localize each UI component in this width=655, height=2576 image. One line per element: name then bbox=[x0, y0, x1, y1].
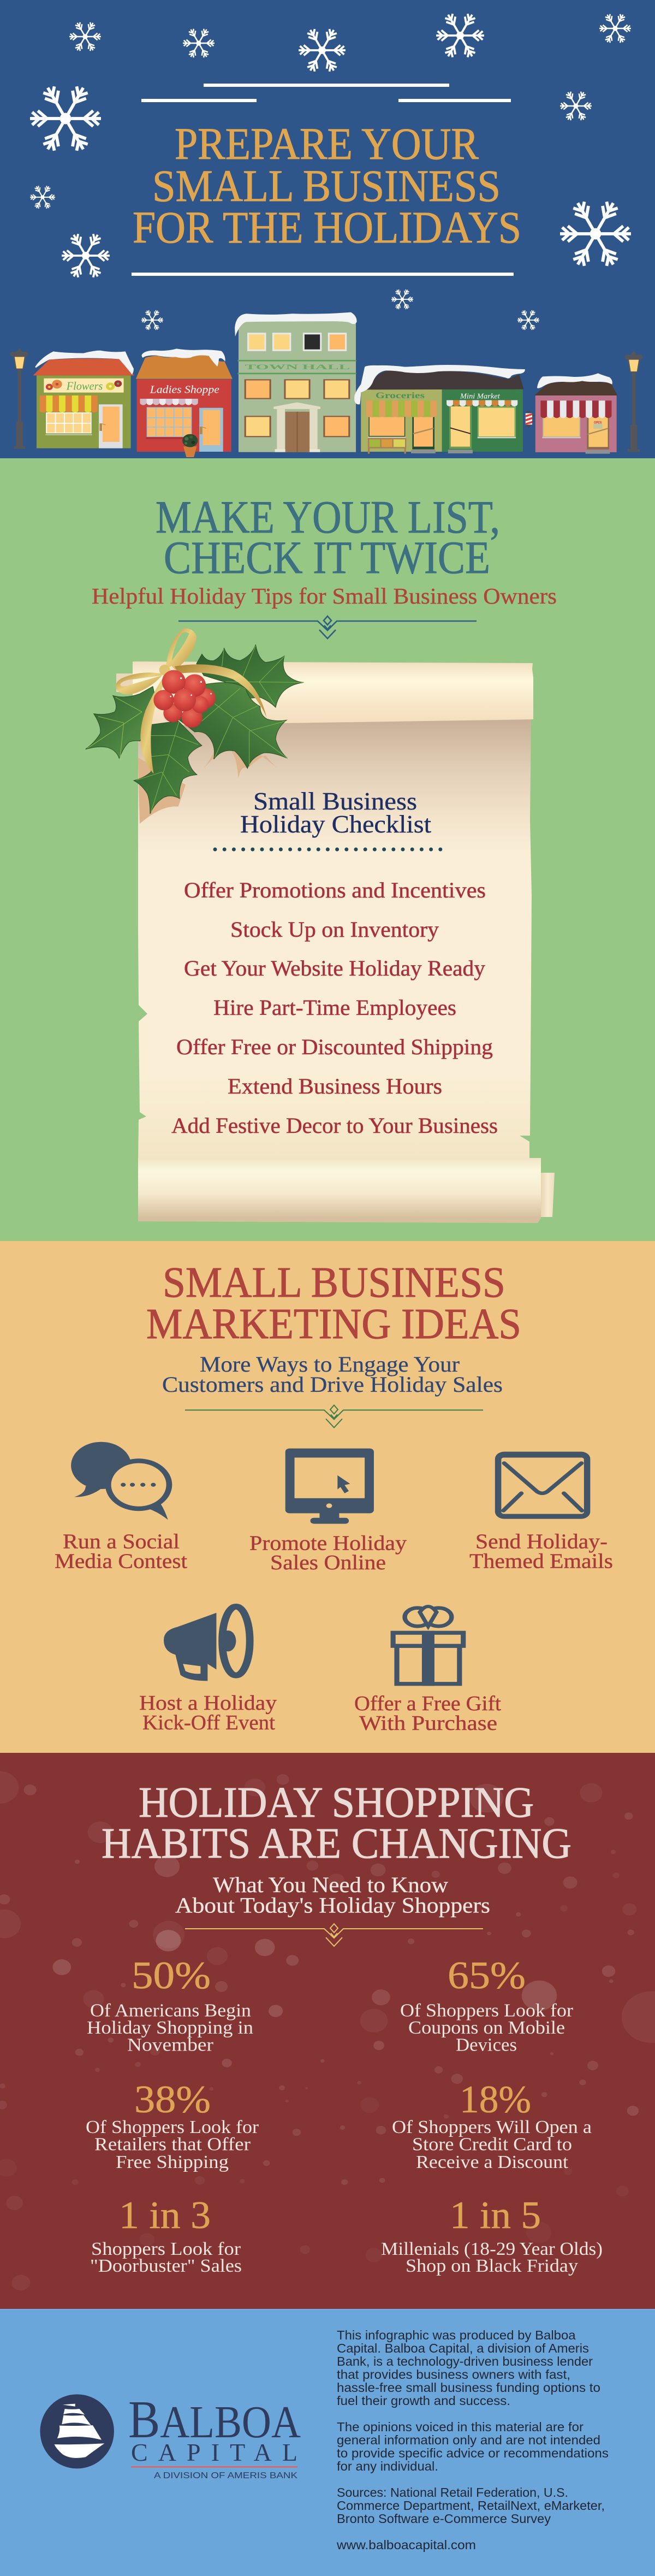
icon: megaphone bbox=[164, 1606, 250, 1681]
logo: wordmark: BALBOA bbox=[128, 2390, 301, 2449]
checklist items: Get Your Website Holiday Ready bbox=[184, 956, 485, 980]
subheading: more ways bbox=[162, 1352, 503, 1397]
text block: disclaimer: The opinions voiced in this material are for bbox=[337, 2420, 583, 2434]
checklist items: Add Festive Decor to Your Business bbox=[171, 1113, 498, 1138]
stat: 38 percent: 38% bbox=[134, 2078, 211, 2121]
stat: 1 in 3: Shoppers Look for bbox=[91, 2239, 241, 2259]
text block: disclaimer: general information only and are not intended bbox=[337, 2433, 600, 2447]
heading: make your list bbox=[156, 492, 500, 583]
website: www.balboacapital.com bbox=[336, 2538, 476, 2552]
shops: groceries and mini market bbox=[354, 365, 525, 454]
stat: 50 percent: Holiday Shopping in bbox=[87, 2018, 253, 2038]
title: FOR THE HOLIDAYS bbox=[133, 202, 521, 252]
stat: 65 percent: Devices bbox=[456, 2035, 517, 2055]
checklist items: Extend Business Hours bbox=[228, 1074, 442, 1098]
subheading: more ways: More Ways to Engage Your bbox=[200, 1352, 460, 1376]
subheading: helpful tips: Helpful Holiday Tips for Small Business Owners bbox=[92, 583, 557, 608]
text block: about bbox=[337, 2328, 600, 2408]
shops: groceries and mini market: Groceries bbox=[376, 391, 425, 400]
panel: make your list bbox=[0, 458, 655, 1241]
street right half bbox=[354, 351, 642, 454]
checklist items: Offer Free or Discounted Shipping bbox=[176, 1035, 493, 1059]
heading: shopping habits: HOLIDAY SHOPPING bbox=[139, 1779, 534, 1827]
text block: sources: Bronto Software e-Commerce Survey bbox=[337, 2512, 551, 2526]
stat: 18 percent: Receive a Discount bbox=[416, 2152, 569, 2172]
text block: about: fuel their growth and success. bbox=[337, 2394, 510, 2408]
subheading: what you need to know bbox=[175, 1872, 490, 1917]
checklist items: Stock Up on Inventory bbox=[230, 917, 439, 942]
stat: 18 percent: Store Credit Card to bbox=[412, 2135, 572, 2154]
stat: 65 percent: Coupons on Mobile bbox=[408, 2018, 565, 2038]
shop: pink storefront bbox=[534, 373, 617, 454]
stat: 38 percent: Retailers that Offer bbox=[94, 2135, 251, 2154]
stat: 1 in 5 bbox=[381, 2194, 603, 2276]
icon: gift box bbox=[393, 1606, 463, 1686]
idea labels: Media Contest bbox=[55, 1550, 187, 1573]
stat: 1 in 5: Millenials (18-29 Year Olds) bbox=[381, 2239, 603, 2259]
logo: wordmark: CAPITAL bbox=[131, 2438, 297, 2466]
idea labels: Host a Holiday bbox=[139, 1692, 277, 1715]
divider bbox=[185, 1405, 483, 1428]
stat: 65 percent bbox=[400, 1954, 574, 2055]
heading: marketing ideas: MARKETING IDEAS bbox=[146, 1301, 521, 1348]
text block: about: hassle-free small business funding options to bbox=[337, 2380, 600, 2395]
heading: marketing ideas: SMALL BUSINESS bbox=[163, 1259, 505, 1307]
panel: marketing ideas bbox=[0, 1241, 655, 1753]
icons bbox=[71, 1442, 590, 1686]
stat: 50 percent: Of Americans Begin bbox=[90, 2000, 251, 2021]
idea labels: Themed Emails bbox=[469, 1550, 613, 1573]
stat: 18 percent: Of Shoppers Will Open a bbox=[392, 2117, 592, 2137]
stat: 65 percent: Of Shoppers Look for bbox=[400, 2000, 574, 2021]
idea labels: Promote Holiday bbox=[249, 1532, 407, 1555]
shop: ladies shoppe bbox=[136, 348, 233, 452]
text block: sources: Sources: National Retail Federation, U.S. bbox=[337, 2485, 568, 2500]
icon: potted plant bbox=[182, 434, 198, 457]
stat: 1 in 3: "Doorbuster" Sales bbox=[90, 2256, 242, 2276]
stat: 50 percent: November bbox=[127, 2035, 214, 2055]
idea labels: Run a Social bbox=[63, 1531, 180, 1553]
text block: disclaimer: to provide specific advice or recommendations bbox=[337, 2446, 609, 2460]
heading: make your list: CHECK IT TWICE bbox=[164, 532, 490, 583]
icon: holly and ribbon bbox=[86, 628, 304, 824]
icon: envelope bbox=[495, 1452, 590, 1519]
heading: shopping habits: HABITS ARE CHANGING bbox=[102, 1820, 571, 1868]
title: PREPARE YOUR bbox=[175, 119, 479, 169]
scroll bbox=[116, 661, 555, 1223]
logo: wordmark: A DIVISION OF AMERIS BANK bbox=[154, 2471, 298, 2480]
divider bbox=[178, 616, 477, 639]
stat: 1 in 5: 1 in 5 bbox=[450, 2194, 541, 2237]
icon: barber pole bbox=[526, 410, 535, 428]
heading: make your list: MAKE YOUR LIST, bbox=[156, 492, 500, 543]
checklist heading: Small Business bbox=[253, 787, 417, 815]
shop: ladies shoppe: Ladies Shoppe bbox=[150, 383, 219, 395]
shop: pink storefront: OPEN bbox=[594, 421, 602, 425]
text block: about: Bank, is a technology-driven business lender bbox=[337, 2354, 593, 2368]
icon: speech bubbles bbox=[71, 1442, 172, 1520]
checklist items: Hire Part-Time Employees bbox=[213, 995, 456, 1020]
idea labels: Kick-Off Event bbox=[142, 1711, 275, 1734]
heading: shopping habits bbox=[102, 1779, 571, 1868]
street left half bbox=[10, 348, 233, 457]
text block: sources bbox=[337, 2485, 605, 2526]
dotted rule bbox=[215, 848, 450, 851]
stat: 38 percent: Of Shoppers Look for bbox=[86, 2117, 259, 2137]
stat: 65 percent: 65% bbox=[448, 1954, 526, 1997]
idea labels: Sales Online bbox=[270, 1551, 386, 1574]
idea labels: Offer a Free Gift bbox=[354, 1692, 501, 1715]
icon: computer monitor bbox=[285, 1449, 374, 1524]
shops: groceries and mini market: Mini Market bbox=[460, 392, 501, 400]
panel: shopping habits bbox=[0, 1753, 655, 2309]
text block: sources: Commerce Department, RetailNext, eMarketer, bbox=[337, 2498, 605, 2513]
text block: about: that provides business owners with fast, bbox=[337, 2367, 570, 2382]
stat: 1 in 5: Shop on Black Friday bbox=[406, 2256, 578, 2276]
text block: disclaimer: for any individual. bbox=[337, 2459, 438, 2473]
logo: ship emblem bbox=[40, 2394, 114, 2468]
text block: disclaimer bbox=[337, 2420, 609, 2473]
title bbox=[133, 119, 521, 252]
snowflakes bbox=[30, 12, 631, 331]
icon: right street lamp bbox=[625, 351, 642, 452]
subheading: what you need to know: About Today's Holiday Shoppers bbox=[175, 1893, 490, 1917]
checklist items bbox=[171, 878, 498, 1138]
panel: footer bbox=[0, 2309, 655, 2576]
stat: 38 percent: Free Shipping bbox=[116, 2152, 229, 2172]
heading: marketing ideas bbox=[146, 1259, 521, 1348]
idea labels: Send Holiday- bbox=[475, 1531, 608, 1553]
stat: 18 percent: 18% bbox=[460, 2078, 531, 2121]
stat: 1 in 3: 1 in 3 bbox=[119, 2194, 211, 2237]
icon: left street lamp bbox=[10, 348, 28, 449]
panel: header bbox=[0, 0, 655, 458]
stat: 18 percent bbox=[392, 2078, 592, 2172]
shop: flowers bbox=[33, 351, 134, 448]
logo: wordmark bbox=[128, 2390, 301, 2480]
idea labels: With Purchase bbox=[359, 1712, 497, 1735]
idea labels bbox=[55, 1531, 613, 1735]
subheading: more ways: Customers and Drive Holiday Sales bbox=[162, 1372, 503, 1397]
title: SMALL BUSINESS bbox=[152, 161, 501, 211]
text block: about: Capital. Balboa Capital, a division of Ameris bbox=[337, 2341, 589, 2355]
stat: 50 percent: 50% bbox=[132, 1954, 211, 1997]
building: town hall: TOWN HALL bbox=[245, 364, 350, 371]
shop: flowers: Flowers bbox=[66, 380, 103, 392]
checklist heading: Holiday Checklist bbox=[240, 810, 431, 838]
title rules bbox=[132, 84, 514, 276]
subheading: what you need to know: What You Need to Know bbox=[213, 1872, 448, 1897]
stat: 50 percent bbox=[87, 1954, 253, 2055]
divider bbox=[185, 1924, 483, 1946]
building: town hall bbox=[235, 312, 357, 452]
checklist heading bbox=[240, 787, 431, 838]
stat: 1 in 3 bbox=[90, 2194, 242, 2276]
stat: 38 percent bbox=[86, 2078, 259, 2172]
checklist items: Offer Promotions and Incentives bbox=[184, 878, 486, 902]
text block: about: This infographic was produced by Balboa bbox=[337, 2328, 576, 2342]
